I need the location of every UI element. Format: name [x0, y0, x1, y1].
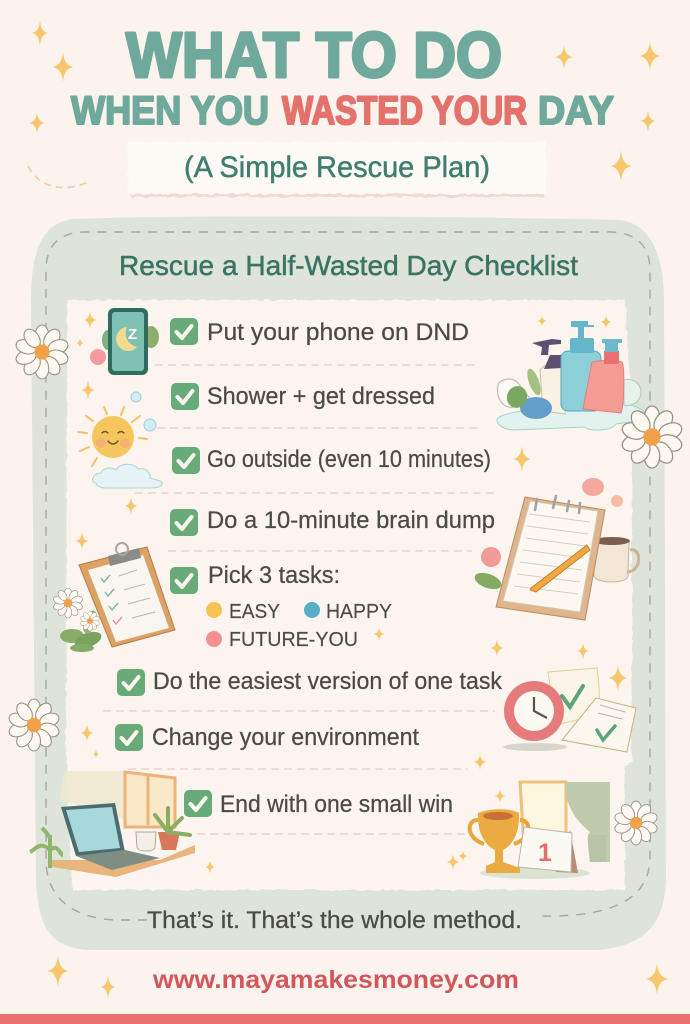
dashed arc decoration — [28, 166, 88, 188]
plant pot — [155, 808, 190, 850]
title line 2: WHEN YOU — [71, 89, 269, 133]
inner sparkles — [76, 311, 628, 874]
title highlight: WASTED YOUR — [282, 89, 527, 133]
item 4 — [170, 507, 495, 536]
blue bottle — [561, 351, 601, 411]
flower: right bottom — [613, 801, 659, 845]
item 6 — [117, 668, 503, 696]
white bottle — [540, 363, 569, 414]
checkbox — [170, 318, 198, 345]
item 7 — [115, 724, 419, 751]
subtitle: (A Simple Rescue Plan) — [184, 151, 490, 184]
item 8 — [184, 790, 453, 818]
laptop — [61, 803, 160, 870]
scene: trophy, calendar, curtain — [447, 782, 610, 879]
cup — [136, 832, 156, 851]
calendar — [518, 827, 578, 873]
paper sheet — [66, 300, 632, 890]
plant left — [30, 828, 63, 868]
flower: left bottom — [7, 699, 61, 751]
subtitle torn paper strip — [128, 142, 546, 197]
icon: phone with moon — [90, 308, 159, 375]
checkbox — [172, 447, 200, 474]
top sparkles — [29, 20, 660, 182]
label: Pick 3 tasks: — [208, 562, 340, 589]
plant — [53, 588, 104, 652]
easy tag — [206, 601, 280, 623]
panel: checklist card — [31, 216, 666, 950]
sponge and leaf — [520, 397, 552, 419]
trophy — [470, 809, 528, 873]
pencil — [530, 545, 590, 592]
icon: sun and cloud — [78, 392, 162, 488]
icon: toiletry bottles — [497, 315, 646, 430]
checkbox — [170, 509, 198, 536]
dashed stitch border — [46, 232, 650, 920]
bottom bar — [0, 1014, 690, 1024]
label: Do the easiest version of one task — [153, 668, 503, 695]
title end: DAY — [538, 89, 614, 133]
pink bottle — [583, 360, 624, 413]
notebook plants — [472, 478, 623, 592]
easy tag: EASY — [229, 601, 280, 623]
checkbox — [171, 383, 199, 410]
item 5 — [170, 562, 392, 651]
icon: phone with moon: Z — [128, 326, 137, 343]
label: Shower + get dressed — [207, 383, 435, 410]
flower: right top — [620, 406, 684, 468]
label: End with one small win — [220, 791, 453, 818]
checkbox — [184, 790, 212, 817]
dashed dividers — [103, 365, 497, 834]
happy tag: HAPPY — [326, 601, 392, 623]
calendar: 1 — [538, 839, 552, 867]
title line 1: WHAT TO DO — [126, 19, 502, 91]
checkbox — [117, 669, 145, 696]
card heading: Rescue a Half-Wasted Day Checklist — [119, 250, 578, 281]
item 3 — [172, 446, 491, 474]
title — [71, 19, 614, 133]
website url: www.mayamakesmoney.com — [152, 966, 519, 994]
flower: left top — [14, 325, 70, 379]
checkbox — [170, 567, 198, 594]
icon: notebook, pencil and cup — [472, 478, 639, 620]
label: Go outside (even 10 minutes) — [207, 446, 491, 473]
future-you tag: FUTURE-YOU — [229, 629, 358, 651]
checkbox — [115, 724, 143, 751]
item 2 — [171, 383, 435, 410]
bottom sparkles — [48, 955, 668, 999]
label: Do a 10-minute brain dump — [207, 507, 495, 534]
coffee cup — [594, 537, 639, 582]
icon: clipboard — [53, 543, 175, 652]
scene: laptop desk — [30, 771, 195, 877]
label: Change your environment — [152, 724, 419, 751]
label: Put your phone on DND — [207, 319, 469, 346]
closing line: That’s it. That’s the whole method. — [147, 907, 522, 934]
icon: clock with checked papers — [503, 668, 636, 752]
item 1 — [170, 318, 469, 346]
